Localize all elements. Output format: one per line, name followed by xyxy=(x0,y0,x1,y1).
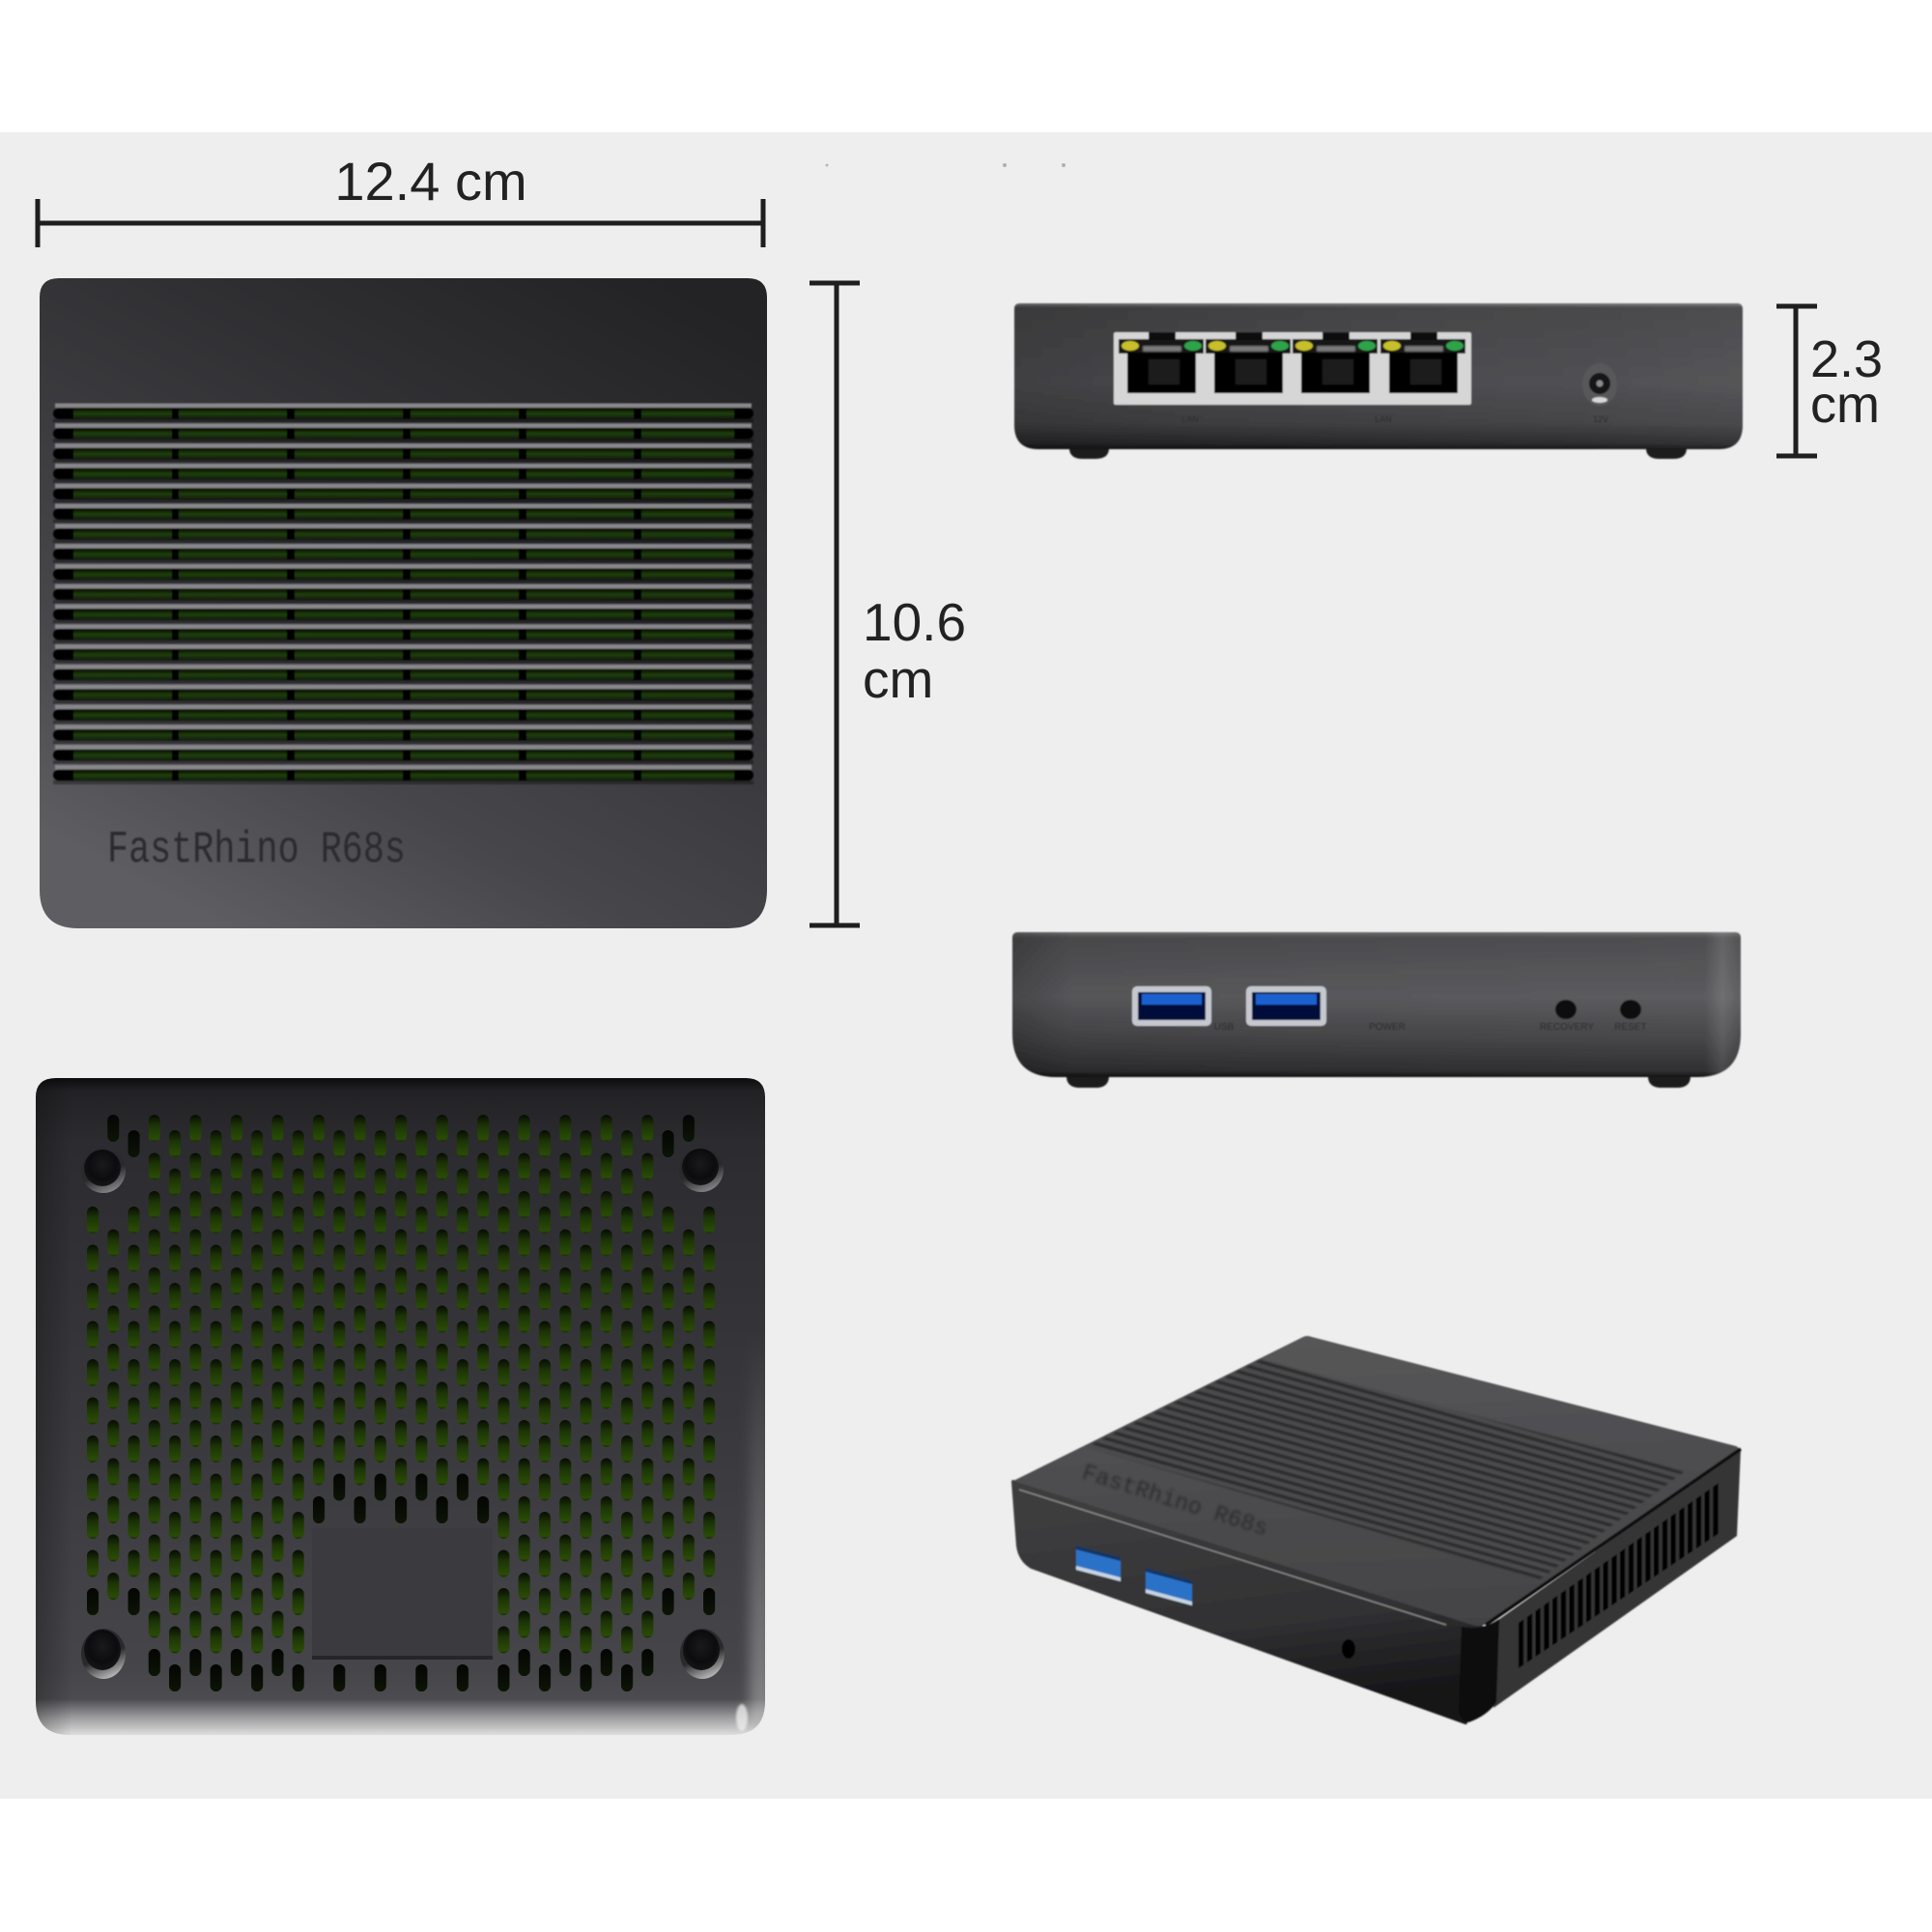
height label: 10.6 xyxy=(863,592,966,652)
iso front face xyxy=(1013,1482,1481,1722)
port labels xyxy=(1181,414,1608,424)
front panel labels: RESET xyxy=(1614,1022,1647,1033)
bottom corner highlight xyxy=(736,1704,748,1731)
width dimension: 12.4 cm xyxy=(38,151,763,247)
ethernet port block xyxy=(1114,332,1471,405)
iso corner edge xyxy=(1459,1619,1499,1722)
stray specks near top edge xyxy=(826,163,1065,167)
iso USB port 1 xyxy=(1076,1546,1121,1581)
width dimension line xyxy=(38,199,763,247)
USB port 1 xyxy=(1132,986,1211,1026)
top view body xyxy=(40,278,767,928)
recovery button hole xyxy=(1555,1000,1577,1019)
screw foot bottom-left xyxy=(81,1629,126,1679)
screw foot bottom-right xyxy=(680,1629,724,1679)
power jack xyxy=(1582,363,1617,406)
engraved model name: FastRhino R68s xyxy=(107,825,406,875)
underside edge shading xyxy=(36,1078,765,1735)
port 2 xyxy=(1206,332,1291,393)
isometric view of device xyxy=(1013,1336,1741,1722)
height dimension: 10.6 cm xyxy=(810,283,966,925)
iso USB port 2 xyxy=(1146,1568,1192,1605)
thickness label unit: cm xyxy=(1810,376,1880,434)
underside plate xyxy=(36,1078,765,1735)
port labels: LAN xyxy=(1181,414,1199,424)
port block frame xyxy=(1114,332,1471,405)
front panel labels: RECOVERY xyxy=(1540,1022,1594,1033)
front panel labels xyxy=(1214,1022,1647,1033)
port 1 xyxy=(1119,332,1204,393)
screw foot top-left xyxy=(81,1149,126,1193)
port 4 xyxy=(1380,332,1465,393)
front panel labels: USB xyxy=(1214,1022,1235,1033)
screw foot top-right xyxy=(679,1148,724,1192)
height dimension line xyxy=(810,283,860,925)
device front view with USB ports xyxy=(1012,932,1741,1088)
port labels: 12V xyxy=(1593,414,1608,424)
reset button hole xyxy=(1620,1000,1641,1019)
iso top grille xyxy=(1086,1359,1685,1579)
device top view panel xyxy=(40,278,767,928)
port 3 xyxy=(1293,332,1378,393)
thickness dimension line xyxy=(1776,306,1817,456)
width label: 12.4 cm xyxy=(334,151,527,212)
iso seam highlight xyxy=(1019,1490,1446,1625)
device bottom view panel xyxy=(36,1078,773,1735)
rubber pad recess xyxy=(312,1528,493,1660)
iso right side vents xyxy=(1519,1481,1721,1668)
USB port 2 xyxy=(1246,986,1326,1026)
port labels: LAN xyxy=(1375,414,1392,424)
height dimension: 2.3 cm xyxy=(1776,306,1883,456)
front view body xyxy=(1012,932,1741,1077)
front panel labels: POWER xyxy=(1369,1022,1406,1033)
iso right edge seam xyxy=(1486,1449,1741,1625)
rear view shading xyxy=(1014,303,1743,449)
lower right edge glow xyxy=(744,1384,765,1721)
front view shading xyxy=(1012,932,1741,1077)
rear view feet xyxy=(1069,444,1687,459)
vent holes (staggered columns A) xyxy=(82,1125,721,1696)
thickness label: 2.3 xyxy=(1810,330,1883,388)
rear view body xyxy=(1014,303,1743,449)
top view vent grille xyxy=(53,403,753,784)
iso right face xyxy=(1493,1449,1741,1708)
front view feet xyxy=(1066,1072,1690,1088)
iso reset hole xyxy=(1342,1639,1355,1659)
height label unit: cm xyxy=(863,649,933,709)
device rear view with network ports xyxy=(1014,303,1743,459)
vent holes (staggered columns B) xyxy=(101,1111,705,1681)
iso model name: FastRhino R68s xyxy=(1079,1461,1271,1543)
iso top face xyxy=(1013,1336,1740,1626)
